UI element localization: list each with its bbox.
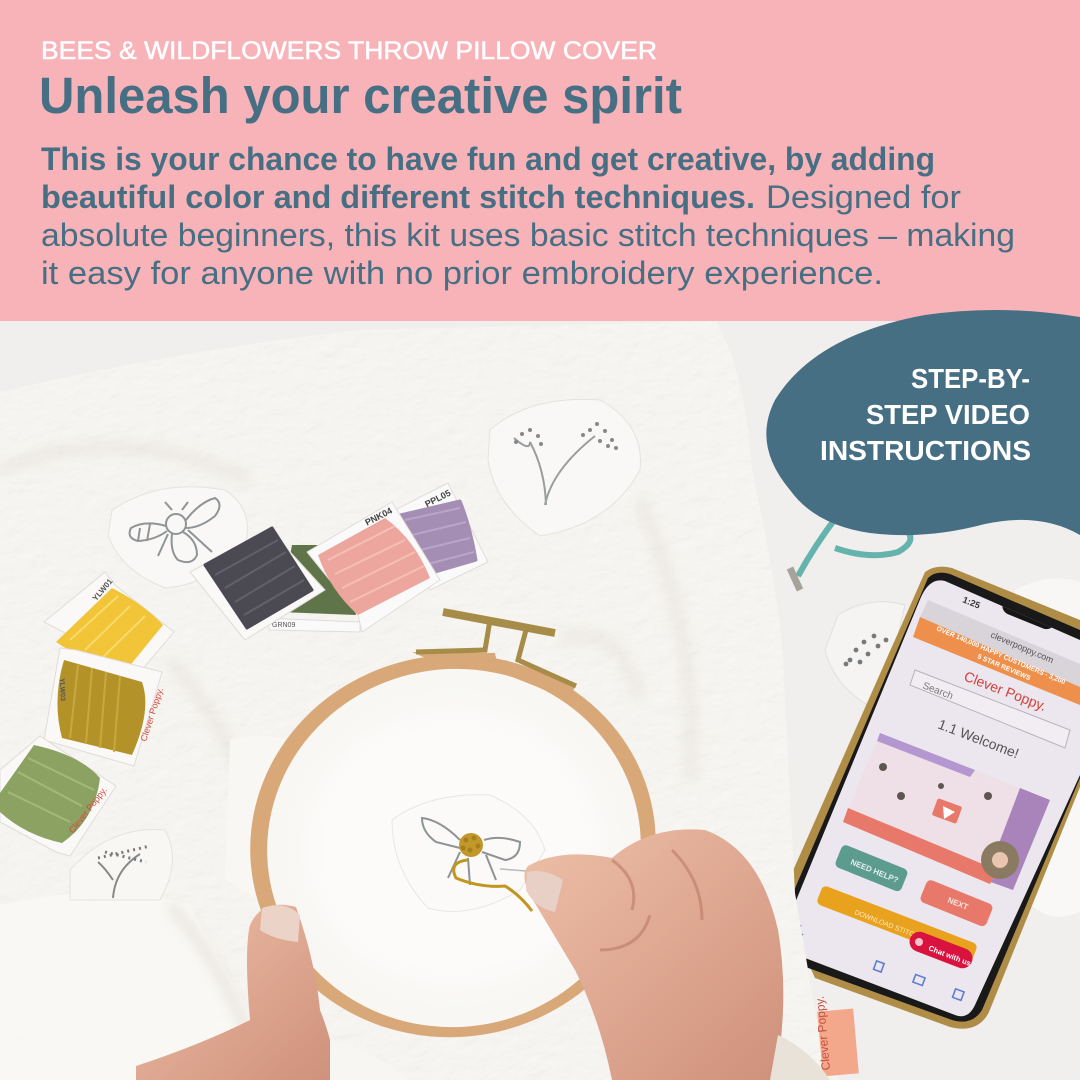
thread bobbin: gold YLW03: Clever Poppy. xyxy=(138,686,165,743)
scissors xyxy=(790,515,910,590)
phone screen content: Clever Poppy. xyxy=(962,668,1049,714)
body text: beautiful color and different stitch techniques. xyxy=(41,179,755,215)
phone screen content: OVER 140,000 HAPPY CUSTOMERS - 3,200 xyxy=(935,625,1066,686)
callout blob: video instructions xyxy=(766,310,1080,535)
phone xyxy=(780,567,1080,1029)
callout text: INSTRUCTIONS xyxy=(820,435,1031,466)
thread bobbin: gold YLW03: YLW03 xyxy=(58,678,66,701)
patch: small wildflower lower left xyxy=(70,830,172,900)
body text: it easy for anyone with no prior embroidery experience. xyxy=(41,255,883,291)
callout text: STEP-BY- xyxy=(911,363,1030,394)
thread bobbin: green xyxy=(0,736,116,856)
phone button: next xyxy=(919,879,994,928)
phone screen content: cleverpoppy.com xyxy=(989,630,1055,665)
fabric pillow cover xyxy=(0,446,808,1080)
phone chat button xyxy=(910,932,972,968)
fabric label tag xyxy=(817,996,859,1076)
photo: embroidery kit scene xyxy=(0,399,1080,1080)
body text xyxy=(41,141,1015,291)
patch: wildflower outline xyxy=(488,399,640,536)
stitched bee patch on hoop xyxy=(392,795,545,911)
phone button: need help xyxy=(834,844,909,893)
thread bobbin: gold YLW03 xyxy=(44,648,165,766)
embroidery hoop xyxy=(250,608,656,1038)
phone screen content: 5 STAR REVIEWS xyxy=(976,653,1032,682)
phone screen content xyxy=(797,594,1080,1000)
phone button: download: DOWNLOAD STITCH GUIDE xyxy=(853,909,943,949)
thread bobbin: pink PNK04 xyxy=(307,502,440,632)
hand: left, holding fabric xyxy=(136,905,333,1080)
patch behind phone, lower right xyxy=(1032,788,1080,916)
table background xyxy=(0,321,1080,1080)
thread bobbin: green GRN09: GRN09 xyxy=(272,622,295,629)
phone chat button: Chat with us xyxy=(927,943,972,968)
thread bobbin: green GRN09 xyxy=(264,545,360,632)
callout text xyxy=(820,363,1031,466)
thread bobbin: charcoal xyxy=(190,528,325,640)
patch behind phone, top right xyxy=(1015,578,1080,620)
thread bobbin: yellow YLW01 xyxy=(44,572,174,672)
thread bobbin: purple PPL05 xyxy=(395,483,488,590)
body text: Designed for xyxy=(766,179,961,215)
eyebrow heading: BEES & WILDFLOWERS THROW PILLOW COVER xyxy=(41,37,657,65)
fabric label tag: Clever Poppy. xyxy=(813,996,833,1071)
fabric fold over left hand xyxy=(330,1040,376,1080)
thread bobbin: green: Clever Poppy. xyxy=(67,785,109,835)
phone button: next: NEXT xyxy=(946,896,970,912)
phone button: need help: NEED HELP? xyxy=(849,858,900,885)
sweater cuff xyxy=(770,1035,830,1080)
phone patch: flower xyxy=(825,602,905,712)
patch: bee outline xyxy=(108,487,248,588)
phone screen content: Search xyxy=(921,681,954,702)
phone video thumbnail xyxy=(843,733,1050,890)
phone button: download xyxy=(816,885,978,963)
phone screen content: 1:25 xyxy=(961,595,982,611)
thread bobbin: pink PNK04: PNK04 xyxy=(363,505,394,528)
body text: absolute beginners, this kit uses basic stitch techniques – making xyxy=(41,217,1015,253)
hand: right, holding needle xyxy=(524,829,783,1080)
phone screen content: 1.1 Welcome! xyxy=(936,716,1021,761)
thread bobbin: purple PPL05: PPL05 xyxy=(423,488,452,509)
body text: This is your chance to have fun and get creative, by adding xyxy=(41,141,935,177)
hoop brass screw xyxy=(416,612,576,686)
fabric bunch under hoop xyxy=(228,740,257,884)
header panel xyxy=(0,0,1080,321)
title: Unleash your creative spirit xyxy=(39,67,682,124)
thread bobbin: yellow YLW01: YLW01 xyxy=(91,577,115,603)
callout text: STEP VIDEO xyxy=(866,399,1030,430)
